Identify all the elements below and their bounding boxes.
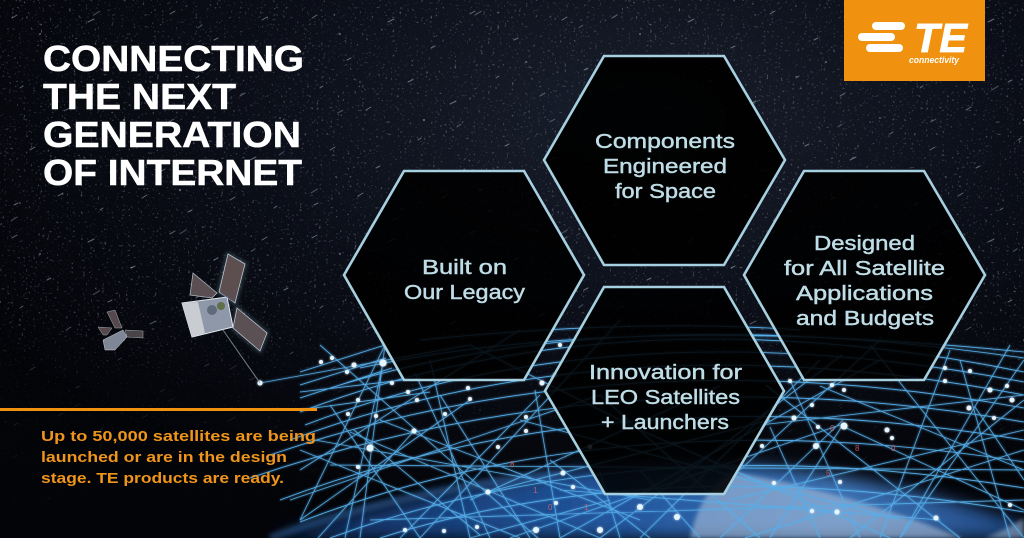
hexagon: built on our legacy: Our Legacy: [404, 282, 525, 304]
hexagon: innovation for LEO satellites and launchers: LEO Satellites: [591, 387, 740, 409]
faint digits on the globe: 5: [826, 469, 831, 478]
divider and callout: [0, 408, 317, 487]
hexagon: designed for all satellite applications: Applications: [796, 283, 933, 305]
satellite: large: [182, 254, 267, 383]
faint digits on the globe: 1: [533, 486, 538, 495]
title: [43, 38, 304, 193]
hexagon: designed for all satellite applications: and Budgets: [796, 308, 934, 330]
hexagon: components engineered for space: [544, 56, 785, 265]
earth horizon: [270, 462, 1024, 538]
hexagon: designed for all satellite applications: Designed: [814, 233, 915, 255]
hexagon: components engineered for space: Engineered: [603, 156, 727, 178]
faint digits on the globe: 0: [830, 424, 835, 433]
divider and callout: Up to 50,000 satellites are being: [41, 428, 316, 445]
faint digits on the globe: 0: [548, 503, 553, 512]
faint digits on the globe: [510, 424, 896, 512]
hexagon: designed for all satellite applications: for All Satellite: [784, 258, 945, 280]
hexagon: components engineered for space: Components: [595, 131, 735, 153]
faint digits on the globe: 0: [891, 444, 896, 453]
hexagon: components engineered for space: for Space: [615, 181, 716, 203]
hexagon: innovation for LEO satellites and launchers: [545, 287, 784, 494]
hexagon: designed for all satellite applications: [744, 171, 985, 380]
satellite: small: [98, 310, 143, 350]
title: CONNECTING: [43, 38, 304, 79]
title: GENERATION: [43, 114, 301, 155]
logo: TE Connectivity: connectivity: [909, 55, 960, 65]
hexagon: innovation for LEO satellites and launchers: Innovation for: [589, 362, 742, 384]
network nodes: [258, 343, 1014, 533]
faint digits on the globe: 8: [855, 444, 860, 453]
divider and callout: launched or are in the design: [41, 449, 287, 466]
network of connected lines over the earth: [250, 320, 1024, 538]
title: THE NEXT: [43, 76, 236, 117]
hexagon: built on our legacy: [344, 171, 584, 380]
faint digits on the globe: 1: [584, 503, 589, 512]
logo: TE Connectivity: [844, 0, 985, 81]
faint digits on the globe: 8: [510, 460, 515, 469]
hexagon: innovation for LEO satellites and launchers: + Launchers: [601, 412, 729, 434]
divider and callout: stage. TE products are ready.: [41, 470, 284, 487]
title: OF INTERNET: [43, 152, 302, 193]
hexagon: built on our legacy: Built on: [422, 257, 507, 279]
logo: TE Connectivity: TE: [914, 15, 969, 61]
